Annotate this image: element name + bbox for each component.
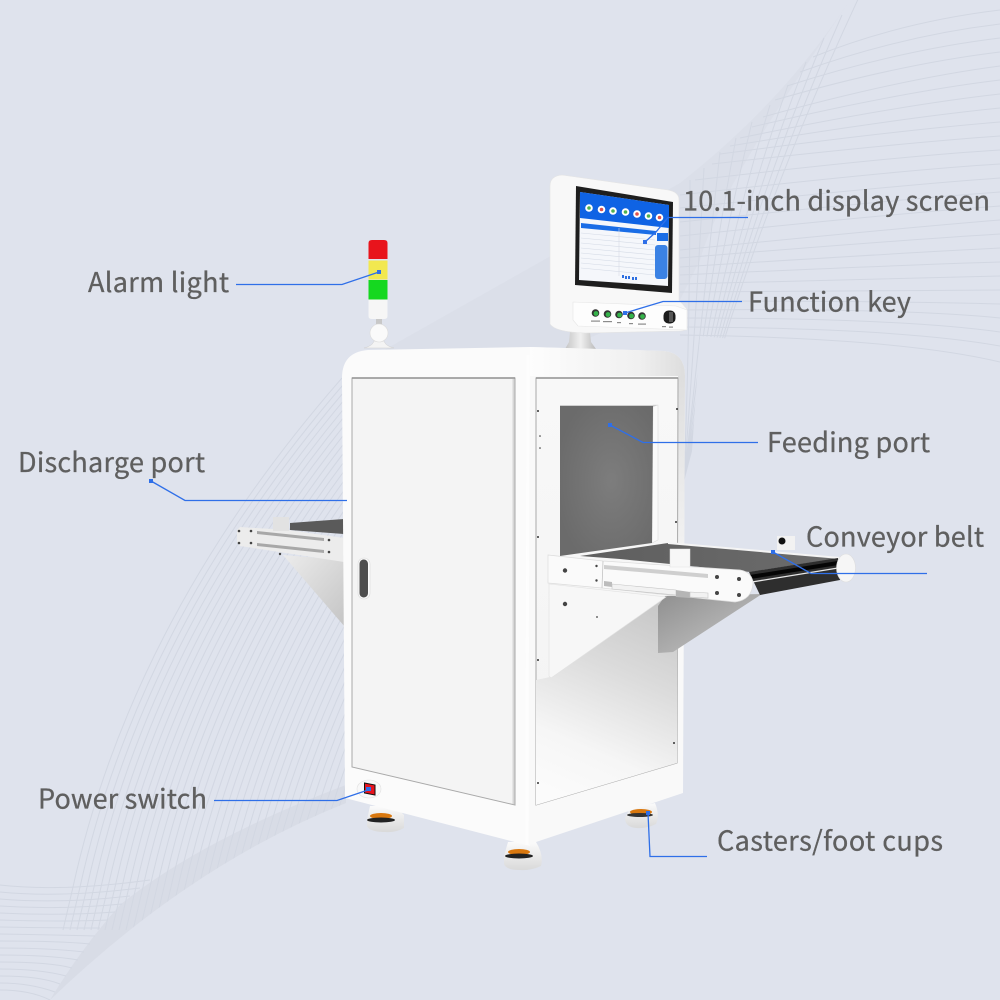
belt surface [580,543,840,572]
callout: power switch: Power switch [38,778,207,816]
red lamp [368,240,388,259]
caster left [367,806,404,832]
front conveyor assembly [548,536,856,678]
rear support bracket [283,555,345,627]
sensor block [777,536,795,550]
shell right edge shading [677,376,685,600]
monitor housing [550,175,687,333]
callout: alarm light [88,261,381,300]
callout: function key: Function key [748,280,911,320]
callout: conveyor belt [771,516,984,574]
background wave lines: top right [680,0,1000,479]
corner seam [527,355,528,845]
screen content [579,192,669,286]
alarm light stem and knob [364,318,394,348]
callout: conveyor belt: Conveyor belt [806,516,984,554]
roller end cap [836,554,856,582]
casters [367,803,658,870]
callout: casters and foot cups [646,811,943,858]
caster centre [504,842,542,870]
callout: alarm light: Alarm light [88,261,229,300]
callout: discharge port: Discharge port [18,441,205,480]
function keys [591,309,646,325]
rear discharge conveyor [237,517,345,627]
side panel [536,378,678,805]
belt side [749,558,840,595]
callout: casters and foot cups: Casters/foot cups [717,820,943,858]
alarm light [364,240,394,348]
callout: feeding port [608,421,930,460]
callout: discharge port [18,441,347,500]
callout: feeding port: Feeding port [767,421,930,460]
door handle [358,558,370,599]
power switch [357,780,381,798]
bracket shadow side [658,594,762,653]
background wave lines: lower left [0,378,345,1000]
caster right [625,803,658,828]
shadow under bracket [536,598,677,805]
side plate [548,555,753,618]
yellow lamp [368,260,388,280]
monitor stand [565,332,596,349]
rear side plate [237,527,344,562]
rear belt [290,519,344,534]
door panel [352,378,515,805]
feeding port opening [560,405,658,556]
display monitor [550,175,687,333]
callout: 10.1-inch display screen [643,180,990,244]
bracket triangle [549,584,666,678]
green lamp [368,280,388,300]
top block [670,549,690,567]
cabinet body [342,347,685,846]
key panel [573,302,687,330]
callout: 10.1-inch display screen: 10.1-inch display screen [683,180,990,218]
screen bezel [575,186,673,293]
white lamp [368,300,388,319]
rotary switch [662,310,676,328]
rear block [273,517,289,531]
cabinet shell right [527,347,685,845]
callout: power switch [38,778,371,816]
shell top shading [530,347,685,376]
cabinet shell left [342,347,530,846]
callout: function key [623,280,911,320]
